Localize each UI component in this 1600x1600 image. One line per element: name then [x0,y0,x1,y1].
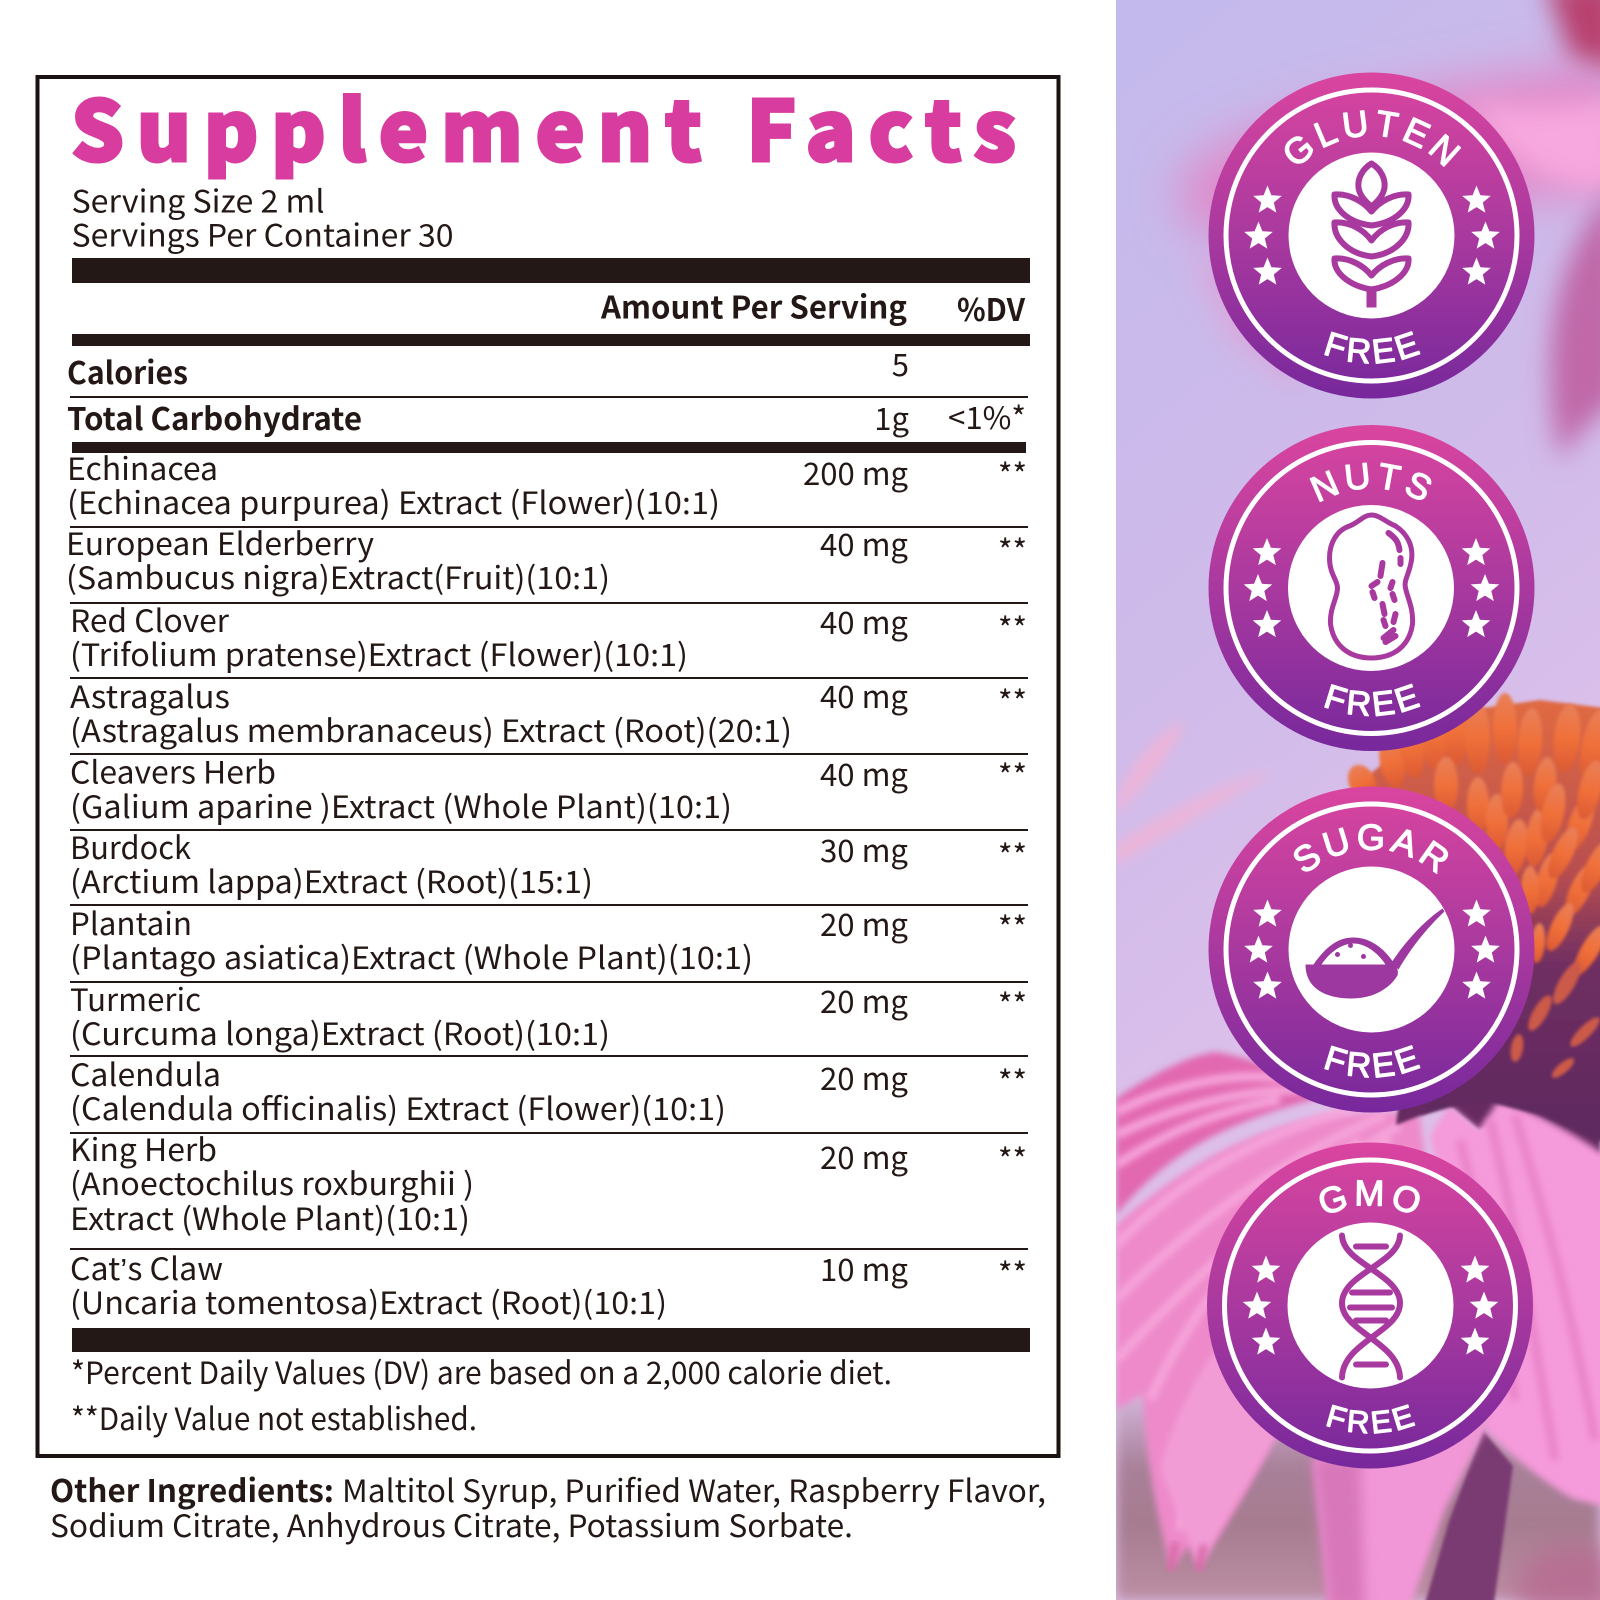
background photo: echinacea flower [1116,0,1600,1600]
orange flower cone [1343,693,1600,1150]
row: plantain: ** [998,903,1027,948]
serving info: Serving Size 2 ml [72,176,324,222]
row: cleavers herb: (Galium aparine )Extract (Whole Plant)(10:1) [70,782,732,827]
icon: wheat [1334,164,1409,308]
row: king herb: (Anoectochilus roxburghii ) [70,1159,474,1204]
badge: gluten free: FREE [1324,331,1420,364]
row: astragalus: (Astragalus membranaceus) Extract (Root)(20:1) [70,706,792,751]
other ingredients: Other Ingredients: [50,1466,334,1511]
row: burdock: Burdock [70,823,191,868]
row: red clover [70,596,1027,675]
icon: peanut [1330,515,1413,658]
row: calories: Calories [67,348,188,393]
row: cleavers herb [70,748,1027,827]
icon: dna helix [1342,1236,1400,1378]
row: cat's claw: Cat’s Claw [70,1244,223,1289]
stars [1244,186,1500,285]
badge: gmo free [1207,1142,1533,1468]
other ingredients: Sodium Citrate, Anhydrous Citrate, Potassium Sorbate. [50,1501,853,1546]
row: burdock: (Arctium lappa)Extract (Root)(15:1) [70,857,593,902]
row: king herb [70,1125,1027,1239]
flower stem [1423,1430,1513,1600]
badge: nuts free: FREE [1324,684,1420,716]
badge: gluten free: GLUTEN [1284,110,1462,167]
stars [1244,538,1499,637]
row: turmeric: (Curcuma longa)Extract (Root)(10:1) [70,1009,610,1054]
row: cleavers herb: ** [998,751,1027,796]
dark centre wedge [1394,1098,1600,1156]
stars [1244,900,1500,999]
row: burdock [70,823,1027,902]
row: cat's claw: (Uncaria tomentosa)Extract (Root)(10:1) [70,1278,667,1323]
row: red clover: (Trifolium pratense)Extract (Flower)(10:1) [70,630,688,675]
row: calendula: 20 mg [820,1054,909,1099]
serving info: Servings Per Container 30 [72,210,454,256]
other ingredients: Maltitol Syrup, Purified Water, Raspberry Flavor, [342,1466,1046,1511]
row: turmeric: Turmeric [70,975,201,1020]
row: calendula: Calendula [70,1050,221,1095]
badge: sugar free: SUGAR [1294,824,1448,874]
row: calendula: (Calendula officinalis) Extract (Flower)(10:1) [70,1084,726,1129]
row: cat's claw: 10 mg [820,1245,909,1290]
row: calendula: ** [998,1057,1027,1102]
row: total carbohydrate: Total Carbohydrate [67,394,362,439]
row: cleavers herb: 40 mg [820,750,909,795]
row: calories: 5 [892,340,909,385]
row: burdock: ** [998,831,1027,876]
badge: gmo free: GMO [1320,1180,1420,1213]
row: turmeric: ** [998,980,1027,1025]
badge: nuts free: NUTS [1310,462,1432,502]
row: calendula [70,1050,1027,1129]
row: plantain: Plantain [70,899,192,944]
icon: spoon of sugar [1306,908,1444,998]
row: echinacea [67,444,1027,523]
row: european elderberry: European Elderberry [66,519,374,564]
other ingredients [50,1466,1046,1546]
badge: sugar free [1208,786,1534,1112]
row: cat's claw: ** [998,1249,1027,1294]
badge: nuts free [1208,425,1534,751]
row: king herb: 20 mg [820,1133,909,1178]
row: red clover: ** [998,604,1027,649]
badge: gmo free: FREE [1326,1404,1416,1434]
row: burdock: 30 mg [820,826,909,871]
row: astragalus: 40 mg [820,672,909,717]
row: total carbohydrate: <1%* [948,393,1026,438]
row: european elderberry: 40 mg [820,520,909,565]
row: red clover: 40 mg [820,598,909,643]
row: turmeric [70,975,1027,1054]
supplement facts panel [38,65,1058,1456]
row: king herb: King Herb [70,1125,217,1170]
column headers [600,282,1026,330]
row: king herb: Extract (Whole Plant)(10:1) [70,1194,470,1239]
right petals [1430,1099,1600,1510]
row: echinacea: 200 mg [803,449,909,494]
badge: sugar free: FREE [1324,1045,1420,1078]
footnotes: **Daily Value not established. [71,1394,477,1439]
footnotes: *Percent Daily Values (DV) are based on a 2,000 calorie diet. [71,1348,892,1393]
stars [1243,1256,1498,1355]
row: cat's claw [70,1244,1027,1323]
row: plantain: (Plantago asiatica)Extract (Whole Plant)(10:1) [70,933,753,978]
row: european elderberry: ** [998,526,1027,571]
row: echinacea: Echinacea [67,444,218,489]
row: red clover: Red Clover [70,596,230,641]
serving info [72,176,454,256]
lower centre petal [1313,1420,1490,1600]
row: plantain: 20 mg [820,900,909,945]
badge: gluten free [1208,72,1534,398]
row: echinacea: ** [998,450,1027,495]
left petals [1116,1112,1430,1568]
row: total carbohydrate [67,393,1026,439]
row: astragalus: Astragalus [70,672,230,717]
row: total carbohydrate: 1g [874,394,910,439]
row: european elderberry: (Sambucus nigra)Extract(Fruit)(10:1) [66,553,610,598]
row: king herb: ** [998,1135,1027,1180]
column headers: %DV [957,285,1026,330]
row: calories [67,340,909,393]
footnotes [71,1348,892,1439]
column headers: Amount Per Serving [600,282,907,328]
row: astragalus: ** [998,677,1027,722]
row: plantain [70,899,1027,978]
row: echinacea: (Echinacea purpurea) Extract (Flower)(10:1) [67,478,720,523]
row: astragalus [70,672,1027,751]
title: Supplement Facts [71,65,1016,185]
row: cleavers herb: Cleavers Herb [70,748,276,792]
ground blur [1116,1380,1600,1600]
row: turmeric: 20 mg [820,977,909,1022]
row: european elderberry [66,519,1027,598]
